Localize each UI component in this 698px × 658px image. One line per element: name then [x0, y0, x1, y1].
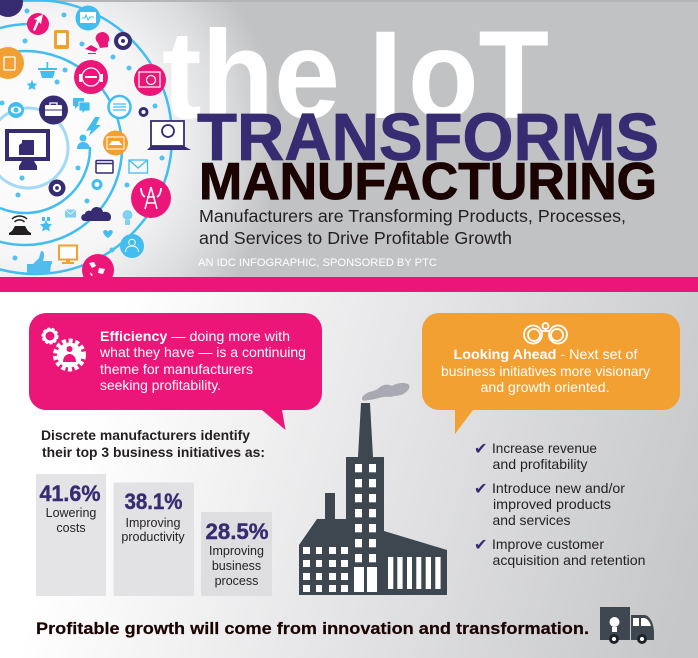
bar: lowering costs — [36, 474, 106, 596]
orbit rings — [0, 0, 172, 274]
item: customers — [474, 535, 646, 568]
item: revenue — [474, 439, 597, 472]
title: TRANSFORMS: TRANSFORMS — [197, 100, 659, 175]
connector dots — [0, 8, 164, 260]
icon: basket — [38, 62, 57, 78]
icon: dark gear — [114, 32, 132, 50]
icon: heart — [103, 230, 113, 238]
subtitle — [199, 206, 626, 248]
item: products: Introduce new and/or — [492, 480, 625, 496]
looking ahead text: business initiatives more visionary — [441, 363, 650, 379]
looking ahead text: and growth oriented. — [480, 379, 610, 395]
item: products: ✔ — [474, 479, 487, 498]
bar: lowering costs: costs — [56, 521, 86, 535]
icon: bulb — [122, 210, 132, 225]
icon: chat bubbles — [73, 98, 90, 114]
bar: improving productivity: 38.1% — [124, 489, 182, 514]
lower background — [0, 292, 698, 658]
bar: lowering costs: Lowering — [46, 506, 96, 520]
icon: pink head with dish — [85, 32, 109, 54]
subtitle: and Services to Drive Profitable Growth — [199, 228, 512, 248]
icon: small gear — [140, 108, 147, 116]
icon: gears with person — [44, 330, 84, 369]
icon: star — [27, 80, 37, 90]
sponsor line: AN IDC INFOGRAPHIC, SPONSORED BY PTC — [198, 257, 437, 269]
efficiency text: theme for manufacturers — [100, 361, 253, 377]
icon: medal — [40, 217, 52, 232]
heading: top 3 initiatives: Discrete manufacturers identify — [41, 427, 250, 443]
efficiency text: what they have — is a continuing — [99, 344, 306, 360]
panel: efficiency callout — [29, 313, 322, 430]
title: the IoT: I — [368, 6, 403, 145]
icon: mail — [129, 160, 148, 173]
icon: thumbs up — [27, 251, 52, 274]
panel: looking ahead callout — [422, 313, 680, 434]
bar: improving business process: business — [212, 559, 261, 573]
icon: pink arrow — [27, 13, 49, 35]
item: products: and services — [492, 512, 570, 528]
illustration: factory — [299, 383, 447, 595]
bar: lowering costs: 41.6% — [40, 481, 100, 506]
icon: tower circle — [131, 178, 171, 218]
bar: improving business process — [201, 512, 272, 596]
efficiency text: Efficiency — doing more with — [100, 328, 290, 344]
bar: improving productivity: Improving — [126, 516, 180, 530]
heading: top 3 initiatives: their top 3 business initiatives as: — [42, 444, 265, 460]
looking ahead text — [441, 346, 650, 395]
item: products — [474, 479, 625, 528]
icon: orange car circle — [103, 130, 128, 156]
efficiency text — [99, 328, 306, 393]
icon network — [0, 0, 191, 286]
bar: improving productivity — [114, 482, 194, 596]
item: products: improved products — [493, 496, 611, 512]
bar: improving business process: Improving — [209, 544, 264, 558]
icon: dark circle — [0, 0, 23, 17]
item: customers: acquisition and retention — [492, 552, 646, 568]
header background — [0, 0, 698, 277]
bar: improving productivity: productivity — [121, 530, 185, 544]
icon: orange monitor — [59, 246, 77, 264]
icon: factory monitor — [5, 129, 50, 170]
icon: camera circle — [134, 64, 166, 96]
pink band — [0, 277, 698, 292]
bar: improving business process: 28.5% — [206, 519, 268, 544]
title: the IoT: oT — [408, 6, 549, 145]
bar: improving business process: process — [215, 574, 258, 588]
icon: dark gear — [48, 180, 66, 196]
closing statement: Profitable growth will come from innovation and transformation. — [36, 619, 589, 638]
icon: lightning — [86, 117, 101, 136]
icon: person circle — [120, 234, 144, 258]
icon: browser window — [96, 160, 113, 173]
checklist: next initiatives — [474, 439, 646, 568]
title: the IoT — [162, 6, 549, 145]
title: MANUFACTURING: MANUFACTURING — [199, 153, 657, 211]
subtitle: Manufacturers are Transforming Products, Processes, — [199, 206, 626, 226]
icon: delivery truck with bulb — [600, 607, 654, 644]
icon: cyan monitor circle — [76, 6, 100, 30]
smoke — [362, 383, 409, 401]
item: customers: Improve customer — [492, 536, 604, 552]
icon: speech circle — [108, 96, 130, 118]
title: the IoT: the — [162, 6, 340, 145]
heading: top 3 initiatives — [41, 427, 265, 460]
icon: small mail — [65, 210, 76, 218]
icon: eye — [8, 102, 24, 118]
efficiency text: seeking profitability. — [100, 377, 221, 393]
looking ahead text: Looking Ahead - Next set of — [454, 346, 638, 362]
icon: person — [77, 134, 90, 149]
icon: connected car — [9, 216, 31, 235]
icon: binoculars — [524, 323, 567, 344]
item: customers: ✔ — [474, 535, 487, 554]
icon: globe — [82, 254, 114, 277]
item: revenue: and profitability — [492, 456, 588, 472]
icon: cyan gear — [93, 180, 101, 188]
icon: headset circle — [74, 60, 108, 94]
icon: briefcase circle — [39, 96, 68, 124]
icon: orange tablet — [54, 30, 69, 49]
icon: cloud — [81, 207, 111, 221]
icon: orange app circle — [0, 47, 24, 79]
icon: laptop — [147, 121, 191, 150]
item: revenue: Increase revenue — [492, 440, 597, 456]
item: revenue: ✔ — [474, 439, 487, 458]
